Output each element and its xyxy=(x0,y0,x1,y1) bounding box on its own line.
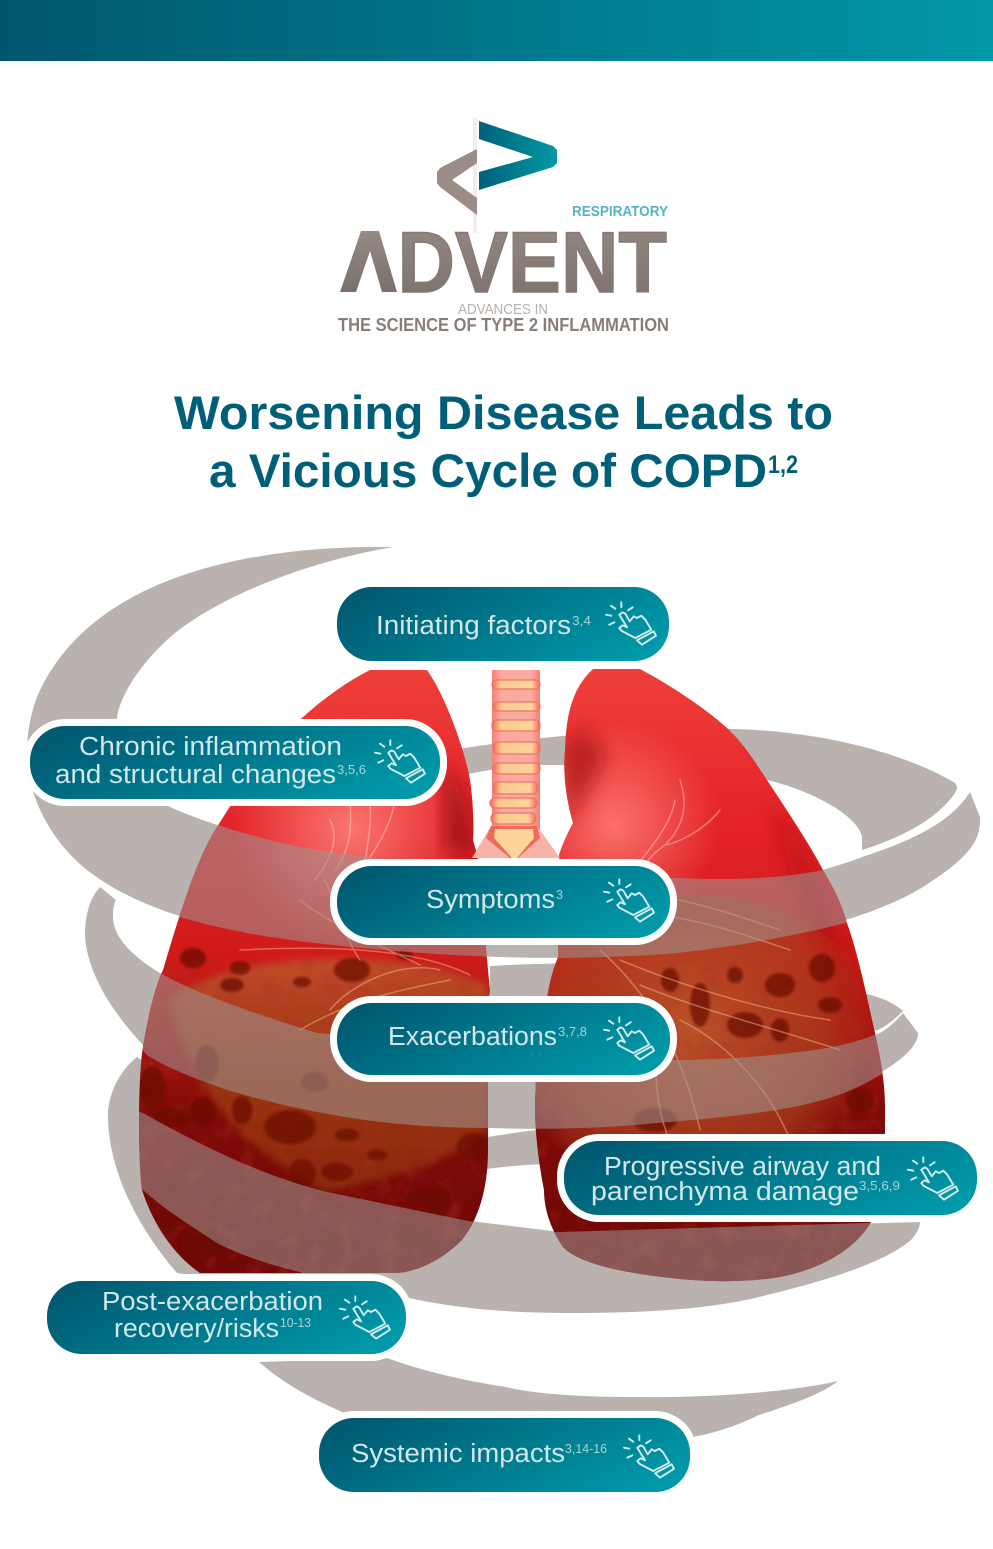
pill: chronic inflammation and structural changes: Chronic inflammation xyxy=(79,733,342,761)
pill: systemic impacts: Systemic impacts xyxy=(351,1440,565,1468)
pill: chronic inflammation and structural changes xyxy=(23,719,447,806)
pill: symptoms: 3 xyxy=(556,887,563,902)
logo: ADVENT Respiratory xyxy=(336,118,669,335)
spiral: translucent bands over the lungs xyxy=(139,825,882,1282)
icon: tap hand xyxy=(624,1435,674,1478)
logo tag: respiratory: RESPIRATORY xyxy=(572,203,668,220)
pill: exacerbations: Exacerbations xyxy=(388,1023,557,1051)
pill: systemic impacts xyxy=(312,1411,697,1499)
icon: tap hand xyxy=(604,879,654,922)
title: Worsening Disease Leads to xyxy=(174,386,833,439)
pill: progressive airway and parenchyma damage xyxy=(557,1134,984,1222)
pill: initiating factors: 3,4 xyxy=(572,613,591,628)
logo subtitle: advances in: ADVANCES IN xyxy=(458,301,548,318)
icon: tap hand xyxy=(606,602,656,645)
spiral: bands behind the lungs xyxy=(27,547,980,1440)
pill: progressive airway and parenchyma damage: Progressive airway and xyxy=(604,1153,881,1181)
lower lobe tissue xyxy=(170,895,885,1192)
pill: symptoms xyxy=(330,859,677,945)
title: 1,2 xyxy=(768,451,798,479)
mottled texture xyxy=(130,960,900,1285)
pill: chronic inflammation and structural changes: and structural changes xyxy=(55,761,336,789)
pill: systemic impacts: 3,14-16 xyxy=(565,1441,607,1456)
pill: chronic inflammation and structural changes: 3,5,6 xyxy=(337,762,366,777)
pill: progressive airway and parenchyma damage: 3,5,6,9 xyxy=(859,1178,900,1193)
logo wordmark: ADVENT xyxy=(340,215,667,311)
upper lobe highlights xyxy=(210,700,890,1100)
pill: initiating factors xyxy=(330,580,676,668)
icon: tap hand xyxy=(908,1157,958,1200)
title: a Vicious Cycle of COPD xyxy=(209,444,767,497)
airway veins xyxy=(240,780,840,1160)
logo subtitle: the science of type 2 inflammation: THE SCIENCE OF TYPE 2 INFLAMMATION xyxy=(338,315,669,335)
icon: logo chevrons xyxy=(437,118,557,233)
header bar xyxy=(0,0,993,61)
pill: progressive airway and parenchyma damage: parenchyma damage xyxy=(591,1178,859,1206)
icon: tap hand xyxy=(375,740,425,783)
pill: post-exacerbation recovery/risks xyxy=(40,1274,413,1361)
title xyxy=(174,386,833,497)
icon: tap hand xyxy=(604,1017,654,1060)
pill: exacerbations xyxy=(330,996,677,1082)
pill: initiating factors: Initiating factors xyxy=(376,612,571,640)
lung lesions xyxy=(139,948,874,1261)
pill: post-exacerbation recovery/risks: 10-13 xyxy=(280,1315,311,1330)
pill: symptoms: Symptoms xyxy=(426,886,555,914)
pill: post-exacerbation recovery/risks: recovery/risks xyxy=(114,1315,279,1343)
pill: exacerbations: 3,7,8 xyxy=(558,1024,587,1039)
pill: post-exacerbation recovery/risks: Post-exacerbation xyxy=(102,1288,323,1316)
lungs xyxy=(130,660,900,1300)
icon: tap hand xyxy=(340,1296,390,1339)
trachea xyxy=(472,670,560,858)
